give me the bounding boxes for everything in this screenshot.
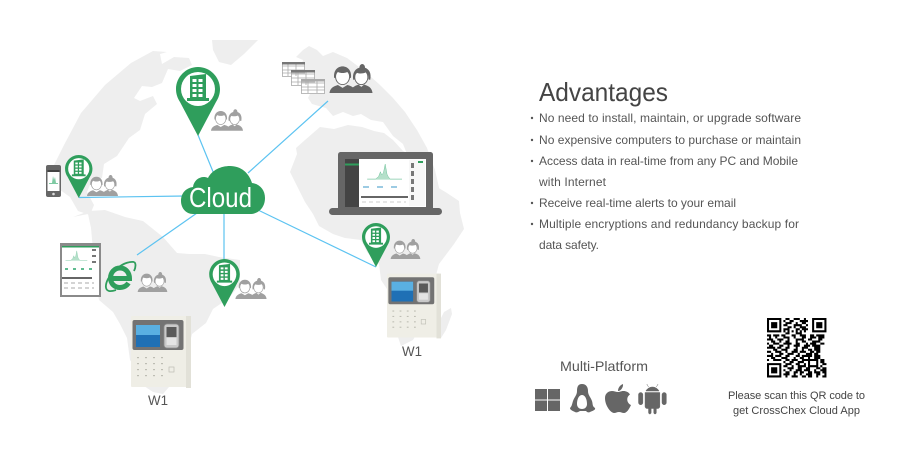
people icon: bottom office [235, 278, 267, 299]
continent: north america [50, 51, 192, 215]
laptop dashboard [329, 152, 442, 215]
QR caption: get CrossChex Cloud App [733, 405, 860, 417]
cloud [181, 166, 265, 214]
label: W1 right: W1 [402, 343, 422, 359]
people icon: right office [391, 239, 420, 259]
device: W1 left [131, 316, 191, 388]
continent: eurasia [296, 46, 440, 192]
QR caption [728, 390, 865, 417]
heading: advantages: Advantages [539, 77, 668, 107]
continent: south america [73, 210, 240, 394]
advantage list: with Internet [538, 175, 607, 189]
continent: africa [290, 125, 464, 346]
tablet browser [60, 243, 101, 297]
people icon: administrators [329, 64, 373, 93]
QR caption: Please scan this QR code to [728, 390, 865, 402]
advantage list: No need to install, maintain, or upgrade software [539, 111, 801, 125]
advantage list: Access data in real-time from any PC and Mobile [539, 154, 798, 168]
icon: windows [535, 389, 560, 411]
advantage list [531, 111, 801, 252]
label: W1 left: W1 [148, 392, 168, 408]
people icon: left office [87, 175, 118, 196]
icon: internet explorer [106, 262, 136, 291]
QR code [767, 318, 826, 377]
pin: right office [362, 223, 390, 267]
continent: madagascar [438, 308, 452, 338]
phone app [46, 165, 61, 197]
pin: top office [176, 67, 220, 136]
pin: bottom office [209, 259, 240, 307]
people icon: browser users [138, 272, 167, 292]
pin: left office [65, 155, 92, 198]
heading: multi-platform: Multi-Platform [560, 358, 648, 374]
continent: greenland fragment [212, 40, 258, 65]
device: W1 right [387, 274, 441, 338]
cloud label: Cloud [189, 182, 252, 213]
icon: apple [605, 384, 631, 413]
connection lines [79, 101, 376, 292]
advantage list: Receive real-time alerts to your email [539, 196, 736, 210]
icon: android [639, 384, 666, 414]
report tables [282, 62, 325, 94]
world map background [50, 40, 464, 394]
advantage list: data safety. [539, 238, 599, 252]
advantage list: Multiple encryptions and redundancy backup for [539, 217, 799, 231]
advantage list: No expensive computers to purchase or maintain [539, 133, 801, 147]
icon: linux [570, 384, 595, 412]
people icon: top office [211, 109, 243, 131]
panel: advantages [531, 77, 801, 252]
